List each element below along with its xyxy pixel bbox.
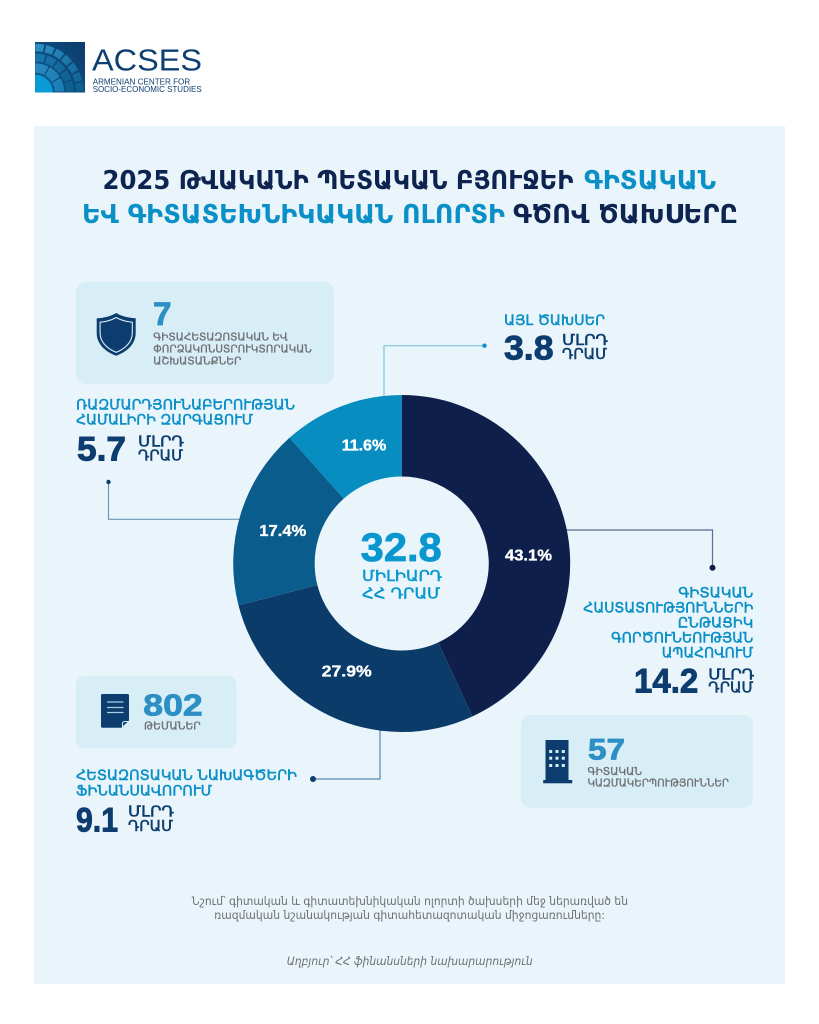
number: 802	[143, 688, 203, 723]
stat card: 802 topics	[76, 676, 236, 748]
segment 17.4%	[233, 438, 344, 605]
callout: 3.8: 3.8	[504, 329, 554, 367]
callout: 14.2: ԳԻՏԱԿԱՆ	[678, 585, 753, 601]
leader lines	[108, 346, 712, 779]
callout: 14.2: ՄԼՐԴ	[708, 665, 754, 683]
callout: 3.8: ԴՐԱՄ	[562, 345, 607, 363]
description: ԳԻՏԱՀԵՏԱԶՈՏԱԿԱՆ ԵՎ	[153, 332, 288, 344]
logo subtitle: SOCIO-ECONOMIC STUDIES	[93, 85, 202, 94]
segment 43.1%	[402, 395, 570, 716]
donut chart	[233, 395, 570, 732]
donut centre total: ՄԻԼԻԱՐԴ	[362, 567, 442, 585]
callout: 5.7: ՌԱԶՄԱՐԴՅՈՒՆԱԲԵՐՈՒԹՅԱՆ	[76, 398, 295, 414]
description	[588, 766, 729, 790]
callout: 14.2: 14.2	[634, 663, 698, 701]
callout: 3.8: ԱՅԼ ԾԱԽՍԵՐ	[504, 313, 605, 329]
callout: 14.2: ԸՆԹԱՑԻԿ	[678, 615, 753, 631]
callout: 5.7: 5.7	[77, 431, 126, 469]
callout: 5.7: ՀԱՄԱԼԻՐԻ ԶԱՐԳԱՑՈՒՄ	[76, 412, 254, 428]
percent labels: 17.4%	[259, 523, 306, 540]
footnote	[192, 894, 628, 922]
title: ԳԻՏԱԿԱՆ	[584, 166, 716, 196]
icon: document	[101, 694, 129, 728]
segment 27.9%	[238, 585, 472, 732]
number: 57	[588, 733, 625, 766]
logo subtitle	[93, 77, 202, 94]
logo subtitle: ARMENIAN CENTER FOR	[93, 77, 190, 86]
percent labels	[259, 438, 552, 681]
icon: shield	[97, 313, 136, 356]
callout: 5.7: ՄԼՐԴ	[138, 433, 184, 451]
callout: 14.2: ՀԱՍՏԱՏՈՒԹՅՈՒՆՆԵՐԻ	[583, 600, 753, 616]
callout: 14.2: ԱՊԱՀՈՎՈՒՄ	[662, 645, 754, 661]
description: ԱՇԽԱՏԱՆՔՆԵՐ	[153, 356, 241, 368]
footnote: ռազմական նշանակության գիտահետազոտական միջոցառումները:	[214, 908, 605, 922]
callout: 14.2	[583, 585, 754, 701]
leader dots	[106, 344, 716, 782]
callout: 9.1: ՖԻՆԱՆՍԱՎՈՐՈՒՄ	[76, 784, 213, 800]
number: 7	[153, 296, 172, 332]
stat card: 57 organizations	[521, 715, 753, 808]
percent labels: 11.6%	[342, 438, 386, 455]
callout: 5.7	[76, 398, 295, 469]
callout: 5.7: ԴՐԱՄ	[138, 447, 183, 465]
title: 2025 ԹՎԱԿԱՆԻ ՊԵՏԱԿԱՆ ԲՅՈՒՋԵԻ	[102, 166, 574, 196]
icon: building	[543, 740, 572, 783]
title: ԵՎ ԳԻՏԱՏԵԽՆԻԿԱԿԱՆ ՈԼՈՐՏԻ	[82, 200, 505, 230]
footnote: Նշում՝ գիտական և գիտատեխնիկական ոլորտի ծախսերի մեջ ներառված են	[192, 894, 628, 908]
callout: 9.1: 9.1	[76, 802, 118, 840]
title	[82, 166, 738, 230]
logo: ACSES	[35, 42, 202, 92]
icon: logo mark	[35, 42, 85, 92]
callout: 14.2: ԴՐԱՄ	[708, 679, 753, 697]
title: ԳԾՈՎ ԾԱԽՍԵՐԸ	[513, 200, 738, 230]
segment 11.6%	[290, 395, 402, 499]
callout: 9.1: ՄԼՐԴ	[128, 803, 174, 821]
callout: 9.1: ԴՐԱՄ	[128, 817, 173, 835]
percent labels: 43.1%	[505, 547, 552, 564]
description: ԹԵՄԱՆԵՐ	[144, 720, 201, 732]
callout: 9.1: ՀԵՏԱԶՈՏԱԿԱՆ ՆԱԽԱԳԾԵՐԻ	[76, 768, 297, 784]
description: ԿԱԶՄԱԿԵՐՊՈՒԹՅՈՒՆՆԵՐ	[588, 778, 729, 790]
percent labels: 27.9%	[322, 664, 372, 681]
callout: 9.1	[76, 768, 297, 840]
logo wordmark: ACSES	[92, 42, 202, 78]
description: ԳԻՏԱԿԱՆ	[588, 766, 642, 778]
callout: 3.8	[504, 313, 608, 367]
stat card: 7 laboratories	[76, 282, 334, 384]
donut centre total: 32.8	[361, 526, 442, 570]
description: ՓՈՐՁԱԿՈՆՍՏՐՈՒԿՏՈՐԱԿԱՆ	[153, 344, 312, 356]
callout: 3.8: ՄԼՐԴ	[562, 331, 608, 349]
source: Աղբյուր՝ ՀՀ ֆինանսների նախարարություն	[287, 954, 533, 968]
description	[153, 332, 312, 368]
callout: 14.2: ԳՈՐԾՈՒՆԵՈՒԹՅԱՆ	[611, 630, 753, 646]
donut centre total: ՀՀ ԴՐԱՄ	[362, 584, 440, 602]
donut centre total	[361, 526, 442, 602]
panel: background	[34, 126, 785, 984]
